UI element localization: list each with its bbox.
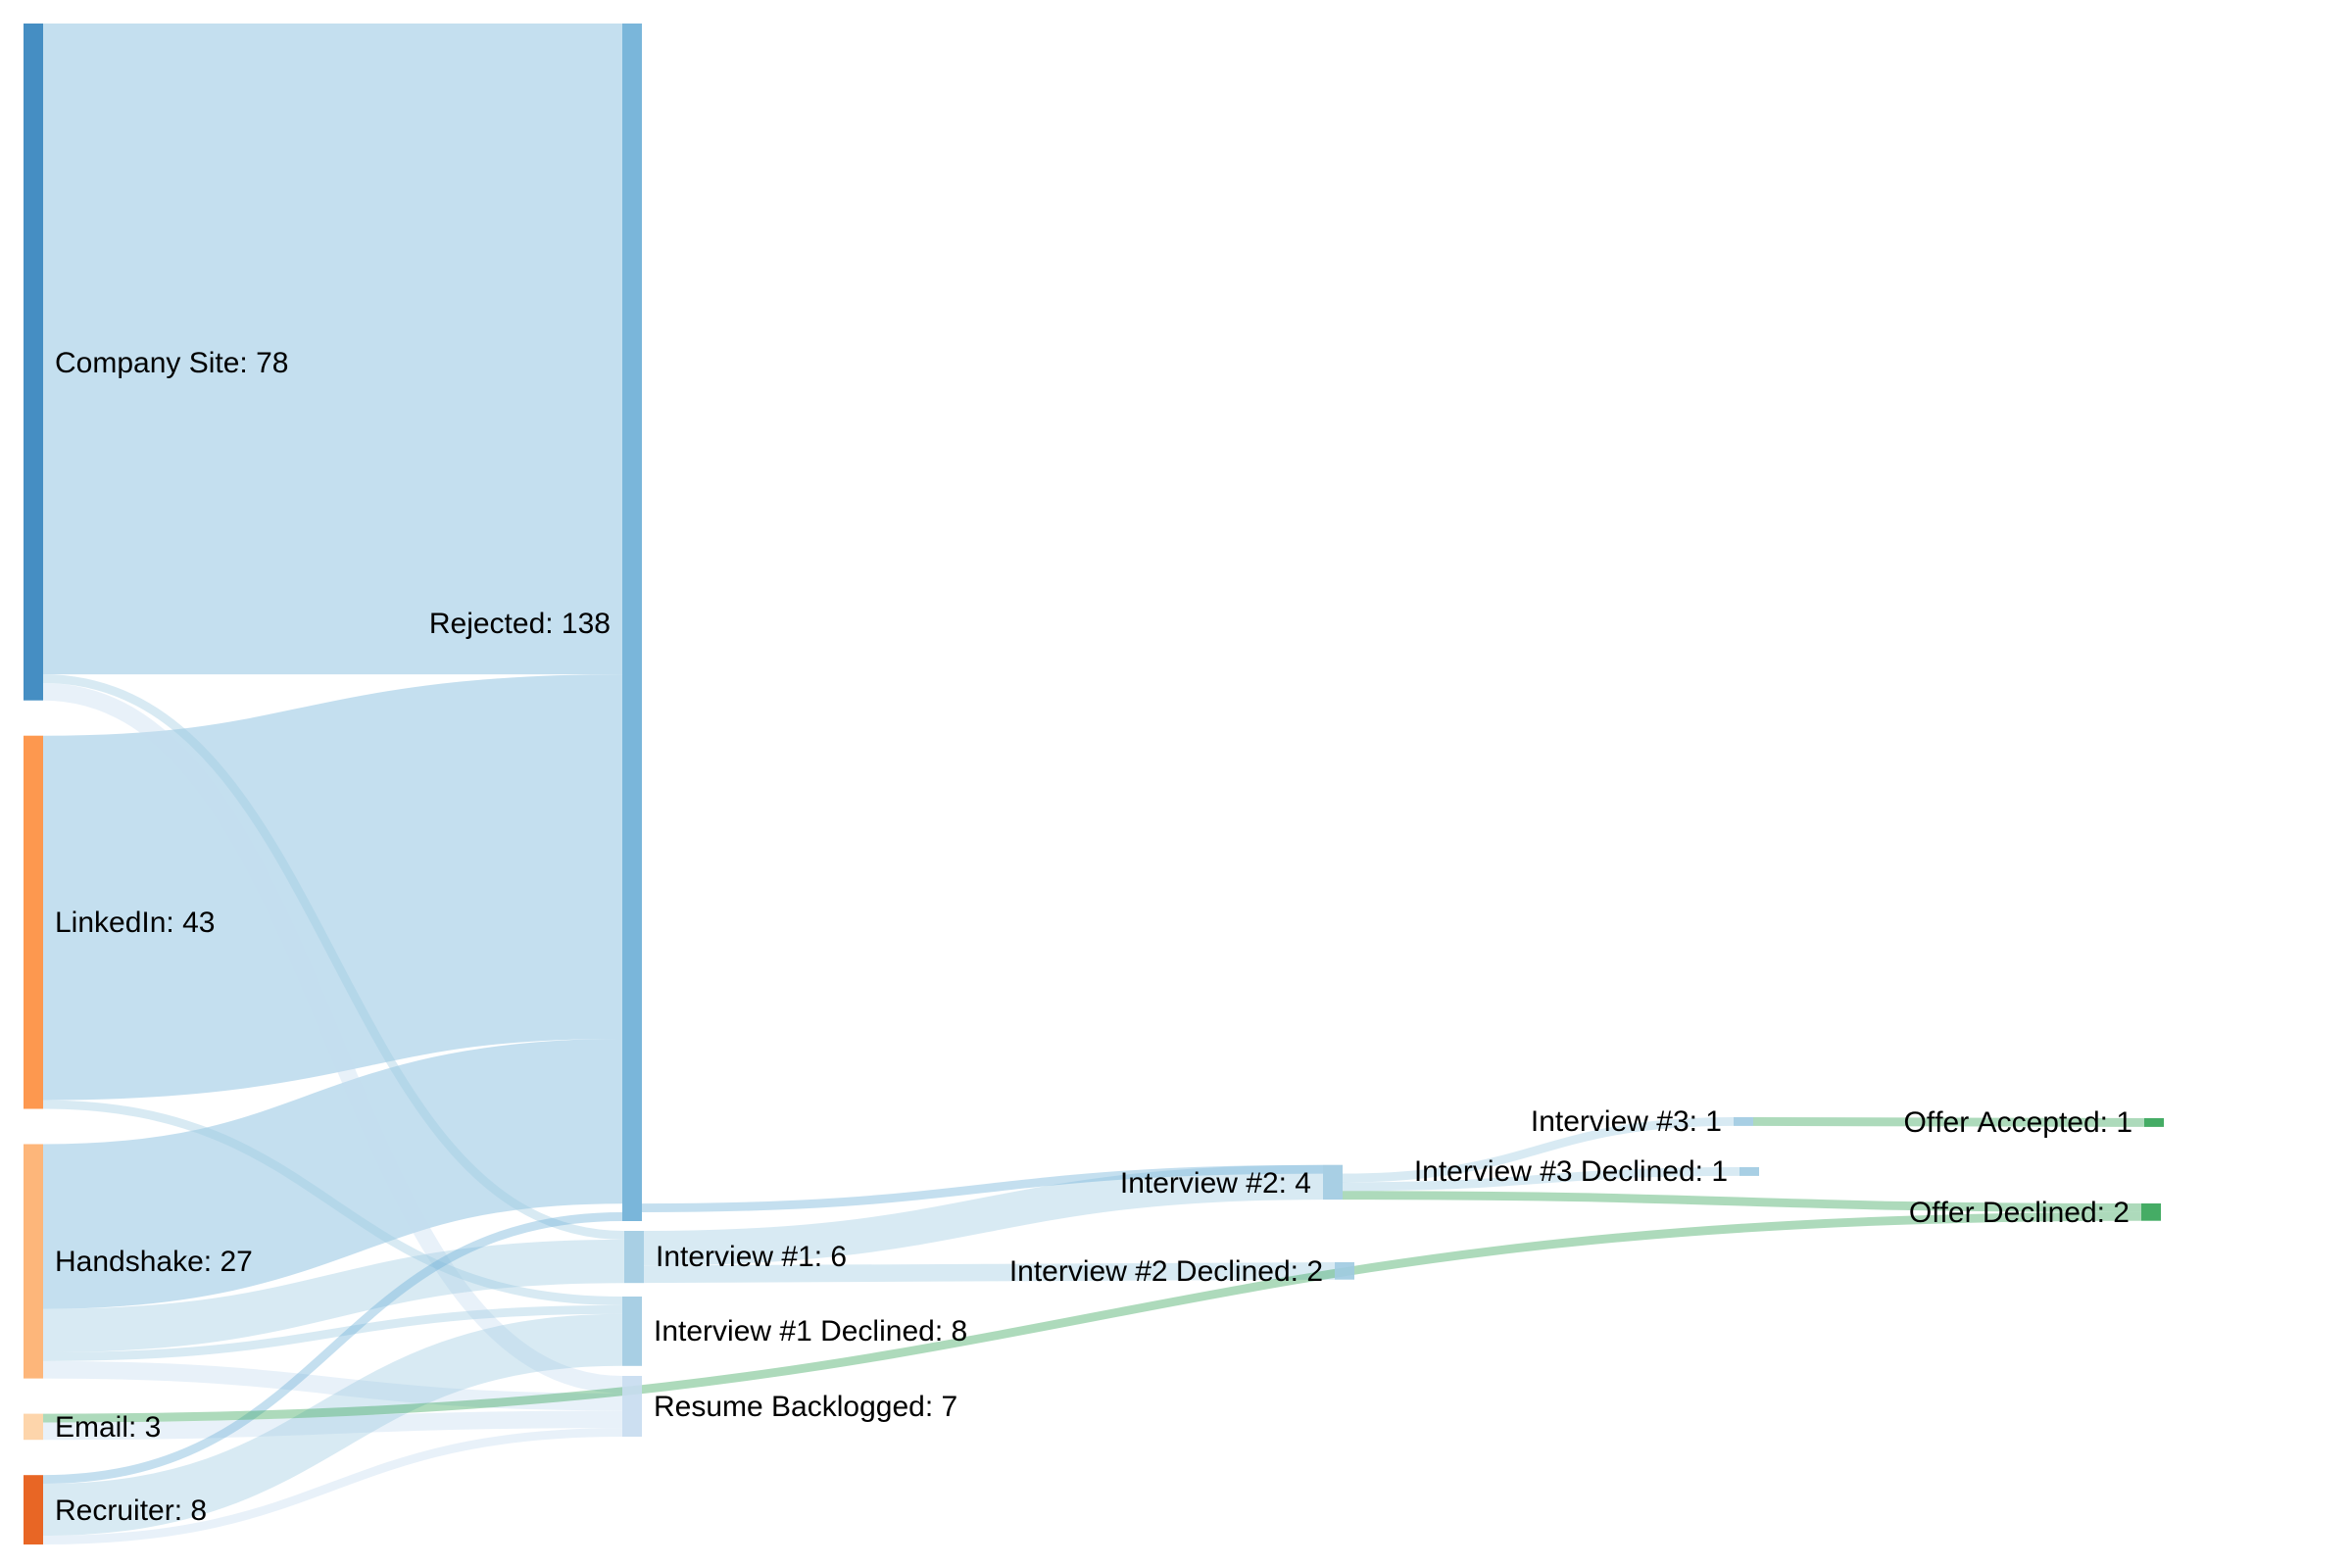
label: Interview #1 Declined: Interview #1 Declined: 8 bbox=[654, 1315, 967, 1348]
links bbox=[43, 349, 2144, 1541]
node: Interview #2 Declined bbox=[1335, 1262, 1354, 1280]
link: Handshake to Rejected bbox=[43, 1121, 622, 1227]
link: Company Site to Interview #1 bbox=[43, 679, 624, 1235]
link: LinkedIn to Rejected bbox=[43, 857, 622, 918]
link: Recruiter to Rejected bbox=[43, 1217, 622, 1480]
link: Interview #1 to Interview #2 Declined bbox=[644, 1271, 1335, 1274]
label: LinkedIn: LinkedIn: 43 bbox=[55, 906, 215, 939]
link: Interview #2 to Interview #3 Declined bbox=[1343, 1171, 1740, 1187]
link: Rejected to Interview #2 bbox=[642, 1169, 1323, 1208]
label: Interview #3: Interview #3: 1 bbox=[1531, 1105, 1722, 1138]
link: Interview #2 to Offer Declined bbox=[1343, 1196, 2141, 1207]
node: Rejected bbox=[622, 24, 642, 1221]
node: Handshake bbox=[24, 1145, 43, 1379]
link: Company Site to Rejected bbox=[43, 24, 622, 674]
link: Handshake to Interview #1 bbox=[43, 1261, 624, 1331]
link: LinkedIn to Interview #1 Declined bbox=[43, 1104, 622, 1300]
node: Company Site bbox=[24, 24, 43, 701]
label: Recruiter: Recruiter: 8 bbox=[55, 1494, 207, 1527]
label: Offer Declined: Offer Declined: 2 bbox=[1909, 1197, 2130, 1229]
label: Resume Backlogged: Resume Backlogged: 7 bbox=[654, 1391, 957, 1423]
node: Interview #3 bbox=[1734, 1117, 1753, 1126]
label: Email: Email: 3 bbox=[55, 1411, 161, 1444]
node: Offer Declined bbox=[2141, 1203, 2161, 1221]
label: Rejected: Rejected: 138 bbox=[429, 608, 611, 640]
link: Company Site to Resume Backlogged bbox=[43, 692, 622, 1385]
link: Handshake to Resume Backlogged bbox=[43, 1370, 622, 1402]
node: Interview #1 Declined bbox=[622, 1297, 642, 1366]
node: Interview #3 Declined bbox=[1740, 1167, 1759, 1176]
label: Interview #2 Declined: Interview #2 Declined: 2 bbox=[1009, 1255, 1323, 1288]
label: Interview #2: Interview #2: 4 bbox=[1120, 1167, 1311, 1200]
label: Company Site: Company Site: 78 bbox=[55, 347, 288, 379]
link: Email to Offer Declined bbox=[43, 1216, 2141, 1418]
node: Interview #2 bbox=[1323, 1165, 1343, 1200]
label: Interview #1: Interview #1: 6 bbox=[656, 1241, 847, 1273]
node: LinkedIn bbox=[24, 736, 43, 1109]
link: Handshake to Interview #1 Declined bbox=[43, 1309, 622, 1356]
node labels bbox=[55, 347, 2132, 1527]
link: Recruiter to Resume Backlogged bbox=[43, 1433, 622, 1541]
node: Email bbox=[24, 1414, 43, 1440]
link: Interview #3 to Offer Accepted bbox=[1753, 1121, 2144, 1122]
label: Interview #3 Declined: Interview #3 Declined: 1 bbox=[1414, 1155, 1728, 1188]
node: Recruiter bbox=[24, 1475, 43, 1544]
node: Interview #1 bbox=[624, 1231, 644, 1283]
node: Offer Accepted bbox=[2144, 1118, 2164, 1127]
link: Email to Resume Backlogged bbox=[43, 1419, 622, 1431]
link: Recruiter to Interview #1 Declined bbox=[43, 1340, 622, 1510]
link: Interview #2 to Interview #3 bbox=[1343, 1121, 1734, 1178]
link: Interview #1 to Interview #2 bbox=[644, 1182, 1323, 1249]
node: Resume Backlogged bbox=[622, 1376, 642, 1437]
label: Offer Accepted: Offer Accepted: 1 bbox=[1904, 1106, 2132, 1139]
label: Handshake: Handshake: 27 bbox=[55, 1246, 253, 1278]
